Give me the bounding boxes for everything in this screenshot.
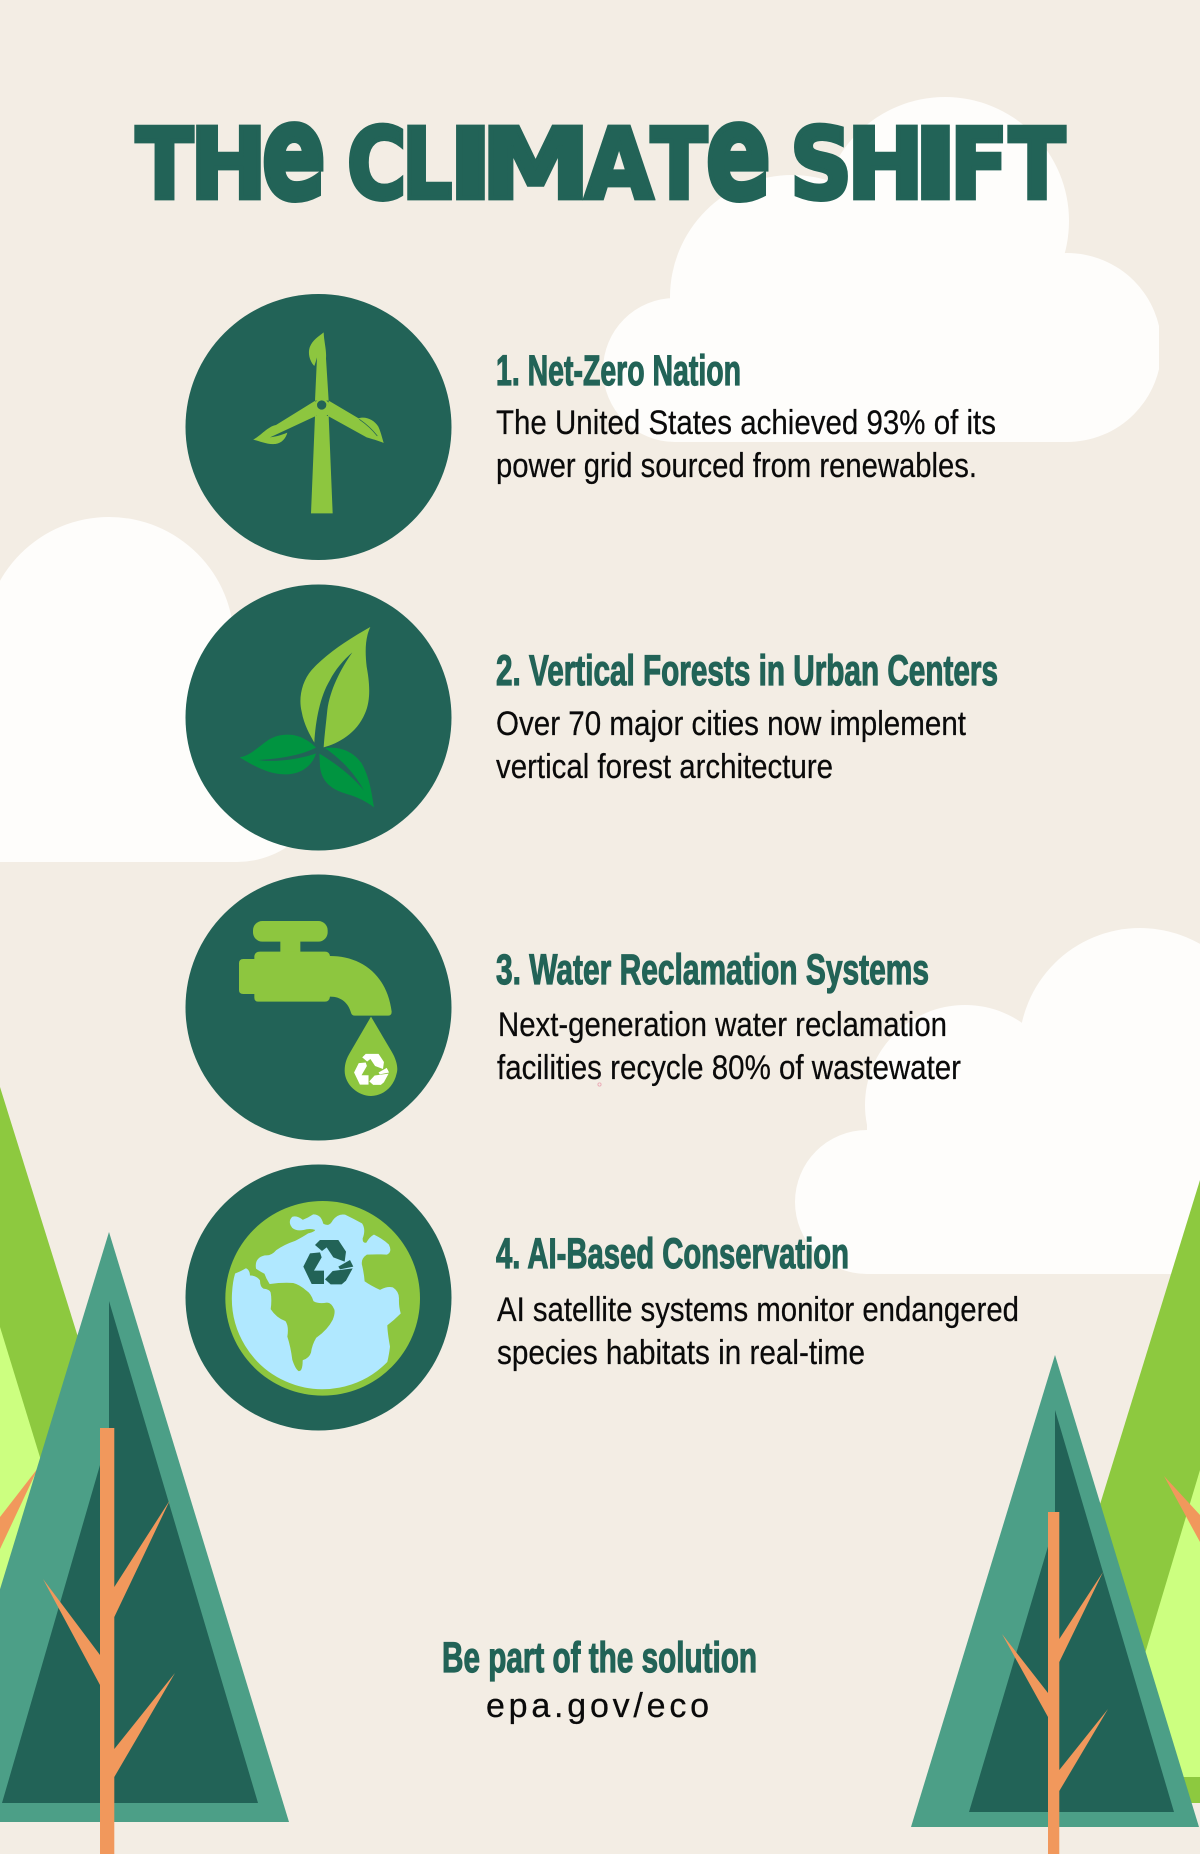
title: I xyxy=(448,108,493,222)
front tree: left xyxy=(0,1232,289,1854)
section 3: water reclamation: 3. Water Reclamation Systems xyxy=(496,946,929,994)
stray mark xyxy=(598,1083,601,1086)
title: F xyxy=(950,108,1008,222)
title: T xyxy=(136,108,193,222)
icon: three leaves xyxy=(186,584,452,850)
icon: earth globe with recycling symbol xyxy=(186,1164,452,1430)
title: A xyxy=(585,108,653,222)
footer call to action: Be part of the solution xyxy=(442,1634,757,1682)
footer call to action xyxy=(442,1634,757,1725)
section 2: vertical forests: Over 70 major cities now implement xyxy=(496,705,966,743)
cloud: left xyxy=(0,517,327,862)
title: e xyxy=(706,76,770,230)
section 4: AI-based conservation xyxy=(496,1230,1019,1372)
footer call to action: epa.gov/eco xyxy=(486,1687,709,1725)
section 4: AI-based conservation: AI satellite systems monitor endangered xyxy=(497,1291,1019,1329)
title: T xyxy=(650,108,707,222)
title: C xyxy=(347,107,406,222)
section 3: water reclamation xyxy=(496,946,961,1087)
title: M xyxy=(481,108,590,222)
section 4: AI-based conservation: 4. AI-Based Conservation xyxy=(496,1230,849,1278)
title: T xyxy=(1008,108,1065,222)
title: e xyxy=(262,76,325,230)
section 1: net-zero nation: 1. Net-Zero Nation xyxy=(496,347,741,395)
title: H xyxy=(847,108,924,222)
front tree: right xyxy=(911,1355,1199,1854)
section 4: AI-based conservation: species habitats in real-time xyxy=(497,1334,865,1372)
section 2: vertical forests xyxy=(496,647,998,786)
section 1: net-zero nation: The United States achieved 93% of its xyxy=(496,404,996,442)
section 2: vertical forests: vertical forest architecture xyxy=(496,748,833,786)
section 1: net-zero nation: power grid sourced from renewables. xyxy=(496,447,977,485)
title: I xyxy=(913,108,958,222)
cloud: right xyxy=(795,928,1200,1274)
title: S xyxy=(790,107,852,222)
section 3: water reclamation: facilities recycle 80% of wastewater xyxy=(497,1049,961,1087)
section 1: net-zero nation xyxy=(496,347,996,485)
icon: wind turbine with leaf blades xyxy=(186,294,452,560)
back trees: left xyxy=(0,1087,160,1620)
icon: water tap with recycling drop xyxy=(186,874,452,1140)
title: H xyxy=(190,108,267,222)
cloud: top right xyxy=(603,97,1162,442)
back trees: right xyxy=(1008,1180,1200,1803)
title xyxy=(134,76,1067,230)
title: L xyxy=(402,108,452,222)
section 3: water reclamation: Next-generation water reclamation xyxy=(498,1006,947,1044)
